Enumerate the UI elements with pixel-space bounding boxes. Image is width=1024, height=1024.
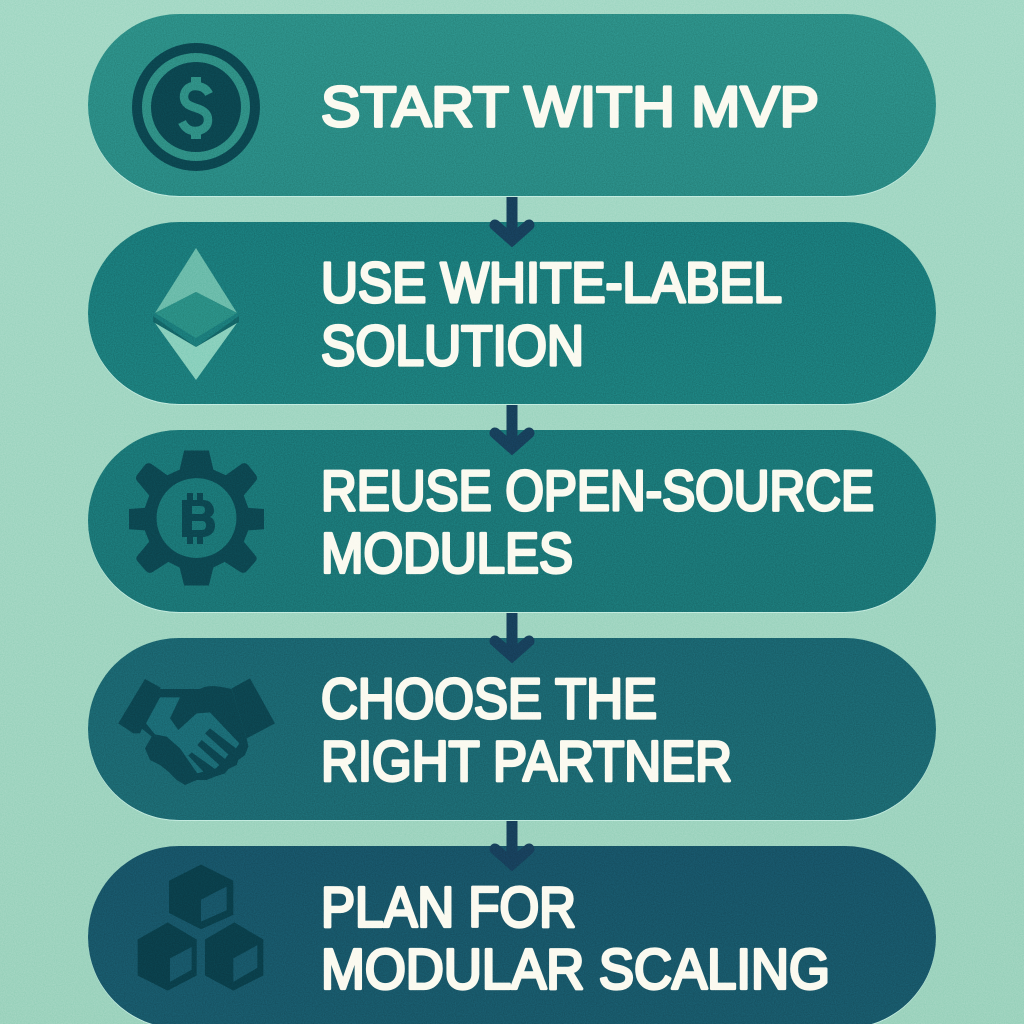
panel: choose the right partner xyxy=(88,638,936,821)
heading: reuse open-source modules: REUSE OPEN-SOURCE xyxy=(321,459,874,523)
panel: reuse open-source modules: MODULES xyxy=(321,522,573,586)
icon: bitcoin letter xyxy=(182,493,215,544)
panel: start with MVP xyxy=(88,14,936,197)
panel: plan for modular scaling: MODULAR SCALING xyxy=(321,938,830,1002)
icon: gear xyxy=(129,450,264,586)
arrow: step 1 to 2 xyxy=(495,197,529,240)
panel: choose the right partner: RIGHT PARTNER xyxy=(321,730,732,794)
panel: plan for modular scaling xyxy=(88,846,936,1024)
arrow: step 4 to 5 xyxy=(495,821,529,864)
heading: use white-label solution: USE WHITE-LABEL xyxy=(321,251,782,315)
heading: plan for modular scaling: PLAN FOR xyxy=(321,876,576,940)
arrow: step 3 to 4 xyxy=(495,613,529,656)
icon: three cubes xyxy=(138,864,263,991)
arrow: step 2 to 3 xyxy=(495,405,529,448)
heading: choose the right partner: CHOOSE THE xyxy=(321,667,657,731)
panel: white-label solution xyxy=(88,222,936,405)
panel: reuse open-source modules xyxy=(88,430,936,613)
icon: handshake xyxy=(118,678,275,785)
icon: dollar coin xyxy=(132,43,260,171)
heading: start with MVP: START WITH MVP xyxy=(321,75,819,139)
panel: white-label solution: SOLUTION xyxy=(321,314,584,378)
icon: ethereum diamond xyxy=(153,248,239,380)
